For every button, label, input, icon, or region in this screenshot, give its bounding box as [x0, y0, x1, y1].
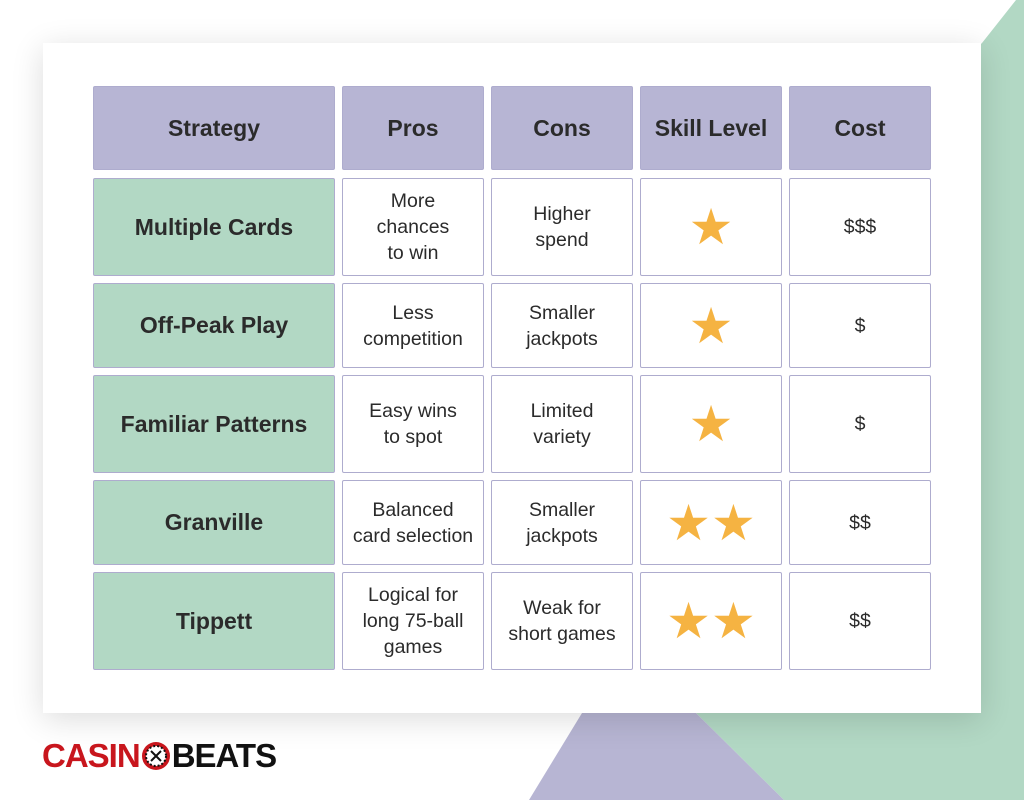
table: to win [388, 242, 438, 264]
table: ★★ [666, 593, 756, 649]
table: card selection [353, 524, 473, 546]
table: jackpots [526, 328, 598, 350]
header: Strategy: Strategy [168, 114, 260, 140]
table: $ [855, 314, 865, 336]
table: $$ [849, 512, 871, 534]
table: Logical for [368, 584, 458, 606]
icon: roulette wheel [142, 742, 170, 770]
table: spend [535, 229, 589, 251]
table: ★ [689, 396, 733, 452]
table: ★★ [666, 494, 756, 550]
table: Smaller [529, 498, 595, 520]
header: Cons: Cons [533, 114, 591, 140]
table: games [384, 636, 442, 658]
row: Multiple Cards [93, 178, 335, 276]
row: Familiar Patterns [93, 375, 335, 473]
table: chances [377, 216, 449, 238]
table: ★ [689, 298, 733, 354]
header: Cons [491, 86, 633, 170]
header: Skill Level: Skill Level [655, 114, 767, 140]
logo: CasinoBeats: BEATS [172, 737, 276, 774]
row: Multiple Cards: Multiple Cards [135, 214, 293, 240]
header: Pros: Pros [387, 114, 439, 140]
table: $$ [849, 610, 871, 632]
table: long 75-ball [363, 610, 463, 632]
table: Less [392, 302, 434, 324]
row: Tippett [93, 572, 335, 670]
table: Limited [531, 400, 593, 422]
header: Cost [789, 86, 931, 170]
table: More [391, 190, 435, 212]
table: Higher [533, 203, 591, 225]
row: Tippett: Tippett [176, 608, 252, 634]
table: Easy wins [369, 400, 457, 422]
row: Granville [93, 480, 335, 565]
table: competition [363, 328, 463, 350]
table: $$$ [844, 216, 876, 238]
table: ★ [689, 199, 733, 255]
logo: CasinoBeats: CASIN [42, 737, 140, 774]
header: Cost: Cost [834, 114, 886, 140]
header: Strategy [93, 86, 335, 170]
header: Pros [342, 86, 484, 170]
table: $ [855, 413, 865, 435]
row: Granville: Granville [165, 509, 263, 535]
row: Familiar Patterns: Familiar Patterns [121, 410, 307, 436]
logo: CasinoBeats [42, 737, 276, 774]
header: Skill Level [640, 86, 782, 170]
table: to spot [384, 426, 442, 448]
table: Balanced [372, 498, 454, 520]
table: Weak for [523, 597, 601, 619]
table: variety [533, 426, 591, 448]
table: jackpots [526, 524, 598, 546]
table: Smaller [529, 302, 595, 324]
table: short games [508, 623, 616, 645]
row: Off-Peak Play [93, 283, 335, 368]
panel: table card [43, 43, 981, 713]
row: Off-Peak Play: Off-Peak Play [140, 312, 288, 338]
